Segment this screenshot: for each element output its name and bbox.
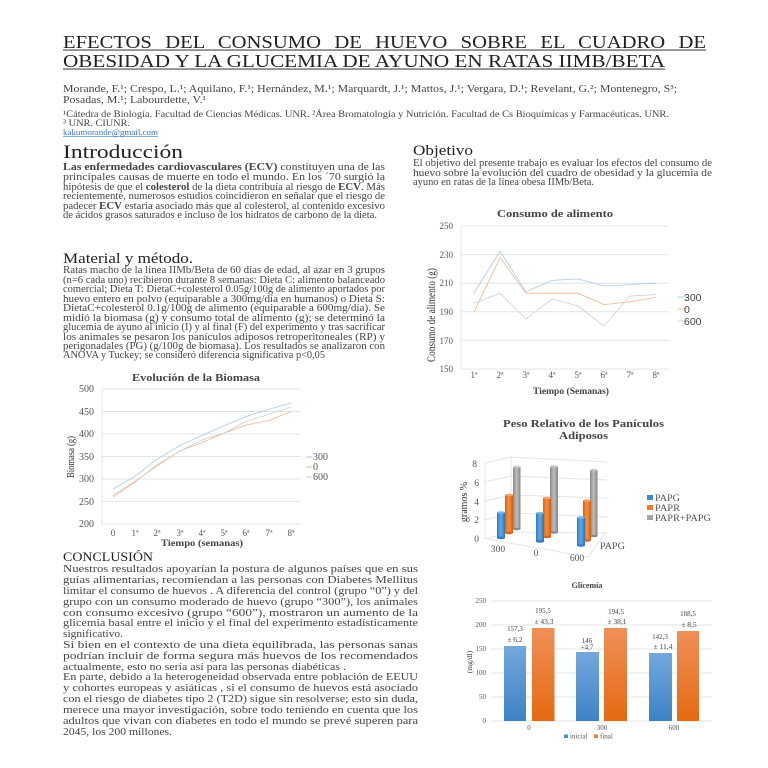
series 300 <box>113 403 291 489</box>
text block: material y método: perigonadales (PG) (g/100g de biomasa). Los resultados se analizaron con <box>63 341 385 352</box>
chart: consumo de alimento: 4ª <box>549 370 556 380</box>
authors: Posadas, M.¹; Labourdette, V.¹ <box>63 94 206 106</box>
bars: grupo 0 <box>504 628 554 721</box>
text block: introducción: hipótesis de que el colesterol de la dieta contribuía al riesgo de ECV. Más <box>63 182 385 193</box>
chart: peso relativo de los panículos adiposos: 8 <box>472 460 477 470</box>
legend: biomasa: 0 <box>313 462 318 473</box>
data labels: ± 38,1 <box>607 617 627 626</box>
data labels: 188,5 <box>680 610 696 618</box>
title <box>63 32 706 71</box>
legend: panículos <box>647 494 711 524</box>
text block: conclusión: actualmente, esto no sería así para las personas diabéticas . <box>63 661 346 673</box>
chart: glicemia: 200 <box>476 621 486 629</box>
text block: introducción: principales causas de muerte en todo el mundo. En los ´70 surgió la <box>63 172 386 183</box>
text block: material y método <box>63 265 386 361</box>
chart: evolución de la biomasa: 300 <box>79 474 94 485</box>
data labels: +4,7 <box>581 644 594 652</box>
data labels: 146 <box>582 637 593 645</box>
text block: material y método: Ratas macho de la línea IIMb/Beta de 60 días de edad, al azar en 3 grupos <box>63 265 385 276</box>
text block: conclusión: 2045, los 200 millones. <box>63 726 172 738</box>
email link: kakumorande@gmail.com <box>63 127 158 137</box>
chart: evolución de la biomasa: Biomasa (g) <box>66 436 77 478</box>
text block: conclusión: con consumo excesivo (grupo “600”), mostraron un aumento de la <box>63 607 418 619</box>
bars: grupo 0 <box>536 465 558 543</box>
legend: biomasa: 300 <box>313 452 328 463</box>
chart: peso relativo de los panículos adiposos: 6 <box>474 479 479 489</box>
affiliations: ³ UNR. CIUNR. <box>63 119 130 129</box>
legend: panículos: PAPR+PAPG <box>655 514 711 524</box>
title: EFECTOS DEL CONSUMO DE HUEVO SOBRE EL CUADRO DE <box>63 32 706 52</box>
heading: conclusión: CONCLUSIÓN <box>63 550 153 564</box>
bars: grupo 600 <box>649 631 699 721</box>
series 600 <box>113 407 291 498</box>
chart: consumo de alimento: 190 <box>440 307 454 317</box>
authors <box>63 83 677 106</box>
chart: evolución de la biomasa <box>66 373 328 549</box>
affiliations: ¹Cátedra de Biología. Facultad de Ciencias Médicas. UNR. ²Área Bromatología y Nutrición. Facultad de Cs Bioquímicas y Farmacéuticas. UNR. <box>63 108 669 120</box>
text block: conclusión: podrían incluir de forma segura más huevos de los recomendados <box>63 650 418 662</box>
text block: conclusión: glicemia basal entre el inicio y el final del experimento estadísticamente <box>63 617 418 629</box>
data labels: ± 11,4 <box>654 642 673 651</box>
chart: glicemia <box>465 581 712 740</box>
legend: panículos: PAPR <box>655 504 681 514</box>
chart: peso relativo de los panículos adiposos: 0 <box>474 535 479 545</box>
text block: material y método: glucemia de ayuno al inicio (I) y al final (F) del experimento y tras sacrificar <box>63 322 386 333</box>
series 0 <box>113 412 291 496</box>
text block: objetivo: El objetivo del presente trabajo es evaluar los efectos del consumo de <box>413 158 713 169</box>
chart: consumo de alimento: 2ª <box>497 370 504 380</box>
chart: consumo de alimento: 170 <box>440 336 454 346</box>
chart: evolución de la biomasa: 0 <box>111 528 116 538</box>
text block: conclusión: con el riesgo de diabetes tipo 2 (T2D) sigue sin resolverse; esto sin duda, <box>63 693 418 705</box>
text block: material y método: DietaC+colesterol 0.1g/100g de alimento (equiparable a 600mg/día). Se <box>63 303 386 314</box>
chart: peso relativo de los panículos adiposos: PAPG <box>600 542 625 552</box>
chart: peso relativo de los panículos adiposos <box>459 419 711 564</box>
text block: introducción: padecer ECV estaría asociado más que al colesterol, al contenido excesivo <box>63 201 385 212</box>
chart: consumo de alimento: 7ª <box>627 370 634 380</box>
chart: glicemia: 300 <box>597 724 608 732</box>
chart: evolución de la biomasa: 450 <box>79 407 94 418</box>
bars: grupo 300 <box>497 466 521 539</box>
data labels: ± 8,5 <box>681 620 697 629</box>
chart: peso relativo de los panículos adiposos: 4 <box>474 498 479 508</box>
chart: consumo de alimento <box>424 208 702 397</box>
chart: evolución de la biomasa: Tiempo (semanas) <box>161 538 243 549</box>
chart: evolución de la biomasa: 3ª <box>177 528 184 538</box>
chart: peso relativo de los panículos adiposos: 2 <box>474 516 479 526</box>
text block: introducción: Las enfermedades cardiovasculares (ECV) constituyen una de las <box>63 162 385 173</box>
text block: objetivo: huevo sobre la evolución del cuadro de obesidad y la glucemia de <box>413 168 713 179</box>
text block: material y método: los animales se pesaron los panículos adiposos retroperitoneales (RP) y <box>63 332 385 343</box>
legend: consumo: 300 <box>684 292 702 304</box>
data labels: 142,3 <box>652 633 668 641</box>
legend: consumo: 0 <box>684 304 690 316</box>
chart: evolución de la biomasa: Evolución de la Biomasa <box>132 373 260 384</box>
data labels <box>507 607 697 652</box>
text block: conclusión: adultos que vivan con diabetes en todo el mundo se prevé superen para <box>63 715 418 727</box>
chart: evolución de la biomasa: 500 <box>79 384 94 395</box>
chart: evolución de la biomasa: 5ª <box>221 528 228 538</box>
chart: glicemia: 150 <box>476 645 486 653</box>
chart: glicemia: (mg/dl) <box>465 650 474 673</box>
chart: consumo de alimento: 250 <box>440 221 454 231</box>
title: OBESIDAD Y LA GLUCEMIA DE AYUNO EN RATAS IIMB/BETA <box>63 51 665 71</box>
text block: conclusión: y cohortes europeas y asiáticas , si el consumo de huevos está asociado <box>63 682 419 694</box>
chart: glicemia: 50 <box>479 693 486 701</box>
chart: evolución de la biomasa: 8ª <box>288 528 295 538</box>
affiliations <box>63 108 669 129</box>
chart: consumo de alimento: 230 <box>440 250 454 260</box>
chart: evolución de la biomasa: 7ª <box>266 528 273 538</box>
legend: consumo <box>678 292 702 328</box>
chart: consumo de alimento: 1ª <box>471 370 478 380</box>
series 0 <box>474 258 656 312</box>
text block: conclusión <box>63 563 419 738</box>
text block: material y método: comercial; Dieta T: DietaC+colesterol 0.05g/100g de alimento aportados por <box>63 284 386 295</box>
chart: evolución de la biomasa: 1ª <box>132 528 139 538</box>
chart: evolución de la biomasa: 200 <box>79 519 94 530</box>
authors: Morande, F.¹; Crespo, L.¹; Aquilano, F.¹; Hernández, M.¹; Marquardt, J.¹; Mattos, J.¹; Vergara, D.¹; Revelant, G.²; Montenegro, S³; <box>63 83 677 95</box>
legend: panículos: PAPG <box>655 494 680 504</box>
chart: glicemia: 600 <box>669 724 680 732</box>
chart: peso relativo de los panículos adiposos: Adiposos <box>559 431 608 442</box>
chart: consumo de alimento: 8ª <box>653 370 660 380</box>
text block: introducción: de ácidos grasos saturados e incluso de los hidratos de carbono de la dieta. <box>63 210 377 221</box>
text block: objetivo <box>413 158 713 188</box>
text block: material y método: (n=6 cada uno) recibieron durante 8 semanas: Dieta C: alimento balanceado <box>63 275 385 286</box>
legend: biomasa <box>306 452 328 483</box>
legend: glicemia: inicial <box>570 732 588 740</box>
text block: objetivo: ayuno en ratas de la línea obesa IIMb/Beta. <box>413 177 594 188</box>
data labels: ± 6,2 <box>507 635 523 644</box>
text block: conclusión: significativo. <box>63 628 123 640</box>
data labels: ± 43,3 <box>534 617 554 626</box>
heading: introducción: Introducción <box>63 142 184 163</box>
text block: conclusión: merece una mayor investigación, sobre todo teniendo en cuenta que los <box>63 704 418 716</box>
legend: glicemia: final <box>600 732 613 740</box>
chart: consumo de alimento: 6ª <box>601 370 608 380</box>
chart: peso relativo de los panículos adiposos: Peso Relativo de los Panículos <box>503 419 664 430</box>
chart: evolución de la biomasa: 4ª <box>199 528 206 538</box>
legend: glicemia <box>564 732 613 740</box>
chart: evolución de la biomasa: 400 <box>79 429 94 440</box>
chart: evolución de la biomasa: 6ª <box>243 528 250 538</box>
legend: consumo: 600 <box>684 316 702 328</box>
chart: evolución de la biomasa: 250 <box>79 497 94 508</box>
chart: peso relativo de los panículos adiposos: 600 <box>570 554 584 564</box>
data labels: 195,5 <box>535 607 551 615</box>
heading: objetivo: Objetivo <box>413 143 473 159</box>
data labels: 157,3 <box>507 625 523 633</box>
text block: conclusión: En parte, debido a la heterogeneidad observada entre población de EEUU <box>63 671 418 683</box>
chart: consumo de alimento: Tiempo (Semanas) <box>533 386 609 397</box>
bars: grupo 300 <box>576 628 627 721</box>
text block: material y método: huevo entero en polvo (equiparable a 300mg/día en humanos) o Dieta S: <box>63 294 385 305</box>
chart: glicemia: 0 <box>482 717 486 725</box>
chart: consumo de alimento: Consumo de alimento <box>497 208 614 220</box>
text block: material y método: midió la biomasa (g) y consumo total de alimento (g); se determinó la <box>63 313 386 324</box>
chart: peso relativo de los panículos adiposos: 300 <box>491 545 505 555</box>
text block: material y método: ANOVA y Tuckey; se consideró diferencia significativa p<0,05 <box>63 350 325 361</box>
chart: evolución de la biomasa: 2ª <box>154 528 161 538</box>
data labels: 194,5 <box>608 608 624 616</box>
chart: consumo de alimento: 210 <box>440 278 454 288</box>
heading: material y método: Material y método. <box>63 251 193 267</box>
text block: conclusión: Si bien en el contexto de una dieta equilibrada, las personas sanas <box>63 639 418 651</box>
series 300 <box>474 251 656 293</box>
chart: glicemia: 250 <box>476 597 486 605</box>
chart: evolución de la biomasa: 350 <box>79 452 94 463</box>
chart: consumo de alimento: Consumo de alimento (g) <box>424 268 438 362</box>
chart: consumo de alimento: 3ª <box>523 370 530 380</box>
series 600 <box>474 293 656 326</box>
chart: glicemia: 0 <box>527 724 531 732</box>
text block: conclusión: guías alimentarias, recomiendan a las personas con Diabetes Mellitus <box>63 574 418 586</box>
bars: grupo 600 <box>577 469 598 547</box>
text block: introducción <box>63 162 386 221</box>
text block: introducción: recientemente, numerosos estudios coincidieron en señalar que el riesgo de <box>63 191 386 202</box>
chart: glicemia: 100 <box>476 669 486 677</box>
chart: glicemia: Glicemia <box>572 581 602 590</box>
chart: consumo de alimento: 5ª <box>575 370 582 380</box>
chart: peso relativo de los panículos adiposos: gramos % <box>459 482 470 522</box>
text block: conclusión: Nuestros resultados apoyarían la postura de algunos países que en sus <box>63 563 418 575</box>
legend: biomasa: 600 <box>313 472 328 483</box>
text block: conclusión: limitar el consumo de huevos . A diferencia del control (grupo “0”) y del <box>63 585 418 597</box>
chart: peso relativo de los panículos adiposos: 0 <box>534 549 539 559</box>
text block: conclusión: grupo con un consumo moderado de huevo (grupo “300”), los animales <box>63 596 418 608</box>
chart: consumo de alimento: 150 <box>440 364 454 374</box>
